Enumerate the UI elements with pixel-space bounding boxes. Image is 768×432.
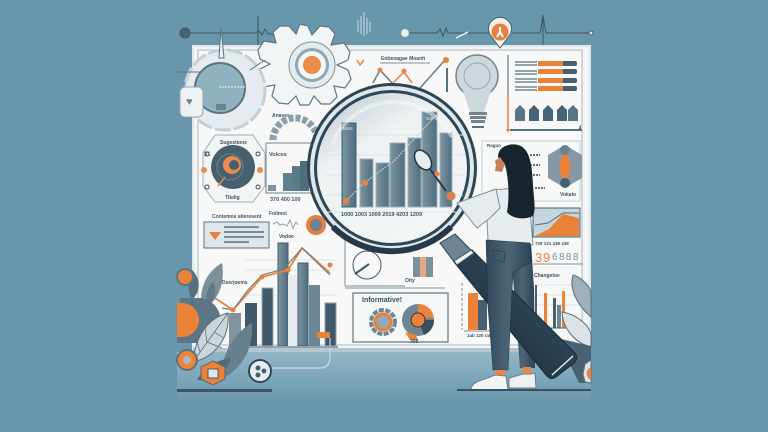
chart in lens: 1000 1003 1009 2019 4203 1209 <box>341 212 422 218</box>
panel: hexagon: Ragun <box>487 143 501 148</box>
floor <box>177 352 591 402</box>
bar chart: lower left: Dserjoems <box>222 280 248 286</box>
panel: dial: Sugestions <box>220 140 247 146</box>
panel: infographic <box>353 293 448 345</box>
panel: area chart <box>533 208 583 265</box>
ground shadow <box>457 389 591 391</box>
chart: tag shapes <box>510 105 582 131</box>
icon: location pin <box>489 17 512 48</box>
sparkline label: Vodoe <box>279 234 294 240</box>
panel: area chart: 3 <box>535 250 542 265</box>
plant right <box>557 275 591 383</box>
person back leg <box>509 240 536 388</box>
icon: ring gear <box>177 28 265 130</box>
front shoe <box>495 370 505 377</box>
magnifying glass <box>307 83 477 253</box>
bar chart: lower left <box>215 243 338 368</box>
board <box>193 46 590 352</box>
small handheld magnifier <box>411 147 446 191</box>
panel: infographic: 308 <box>410 339 419 345</box>
chart: orange bars behind person: 1ab 120 rab <box>467 333 492 338</box>
panel: dial: Tikdig <box>225 195 240 201</box>
panel: small gear header: Anaves <box>272 113 290 119</box>
chart: zigzag line <box>357 56 449 92</box>
top connector lines <box>180 12 593 60</box>
panel: area chart: 9 <box>543 250 550 265</box>
panel: dial: 31 <box>204 152 211 158</box>
panel: meter <box>345 232 445 288</box>
chart: orange bars behind person <box>462 283 504 338</box>
chart: changes: Changetoe <box>534 273 560 279</box>
panel: content card <box>204 214 269 248</box>
arm <box>457 189 500 228</box>
bar chart: volume <box>266 143 316 203</box>
hair <box>498 144 535 218</box>
chart in lens <box>341 112 452 218</box>
panel: meter: Oity <box>405 278 415 284</box>
panel: dial <box>201 135 265 202</box>
front leg <box>486 240 532 370</box>
shirt <box>487 187 533 245</box>
panel: area chart: 6888 <box>552 252 580 263</box>
face <box>495 157 505 172</box>
panel: area chart: 729 121 338 438 <box>535 241 569 246</box>
panel: infographic: Informative! <box>362 297 402 304</box>
icon: ring gear: ♥ <box>186 96 193 108</box>
magnifying glass handle <box>440 234 577 379</box>
icon: light bulb <box>456 55 498 127</box>
chart in lens: MSS <box>343 126 353 131</box>
icon: large gear <box>258 24 351 105</box>
plants lower left <box>177 263 272 392</box>
panel: small gear header <box>272 113 317 140</box>
sparkline label: Folimol <box>269 211 287 217</box>
chart: zigzag line: Enbenagae Moanh <box>381 56 425 62</box>
panel: hexagon: Vokalo <box>560 192 576 198</box>
bar chart: volume: Volcos <box>269 152 287 158</box>
chart in lens: 408 <box>426 116 434 121</box>
chart: changes <box>534 273 580 328</box>
chart: horizontal progress bars <box>506 55 577 133</box>
icon: round badge <box>249 360 271 382</box>
panel: hexagon <box>482 141 582 201</box>
person <box>446 144 535 390</box>
bar chart: volume: 370 400 100 <box>270 197 301 203</box>
sparkline label <box>269 211 326 240</box>
panel: content card: Contemos atieresent <box>212 214 262 220</box>
